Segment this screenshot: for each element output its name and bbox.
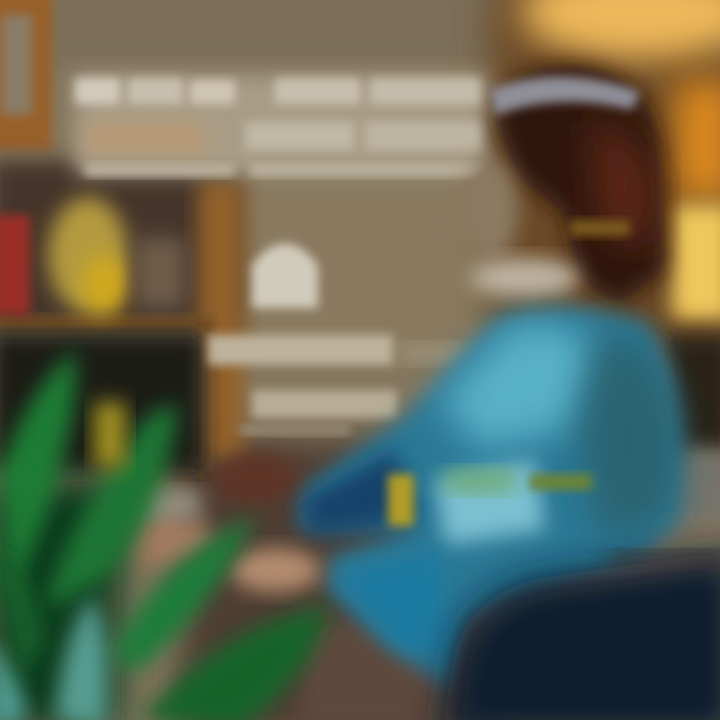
hands bbox=[115, 452, 321, 592]
person: hair and head bbox=[462, 65, 665, 305]
bookshelf bbox=[0, 0, 244, 472]
warm lamp glow bbox=[490, 0, 720, 520]
plant bbox=[0, 350, 328, 720]
heading: illegible title band bbox=[75, 75, 485, 176]
shelf objects bbox=[0, 197, 185, 315]
text block: illegible caption bbox=[208, 335, 465, 435]
sofa bbox=[440, 550, 720, 720]
icon: pale house bbox=[252, 244, 318, 308]
sweater accents bbox=[388, 470, 592, 526]
person: blue sweater bbox=[300, 307, 682, 690]
